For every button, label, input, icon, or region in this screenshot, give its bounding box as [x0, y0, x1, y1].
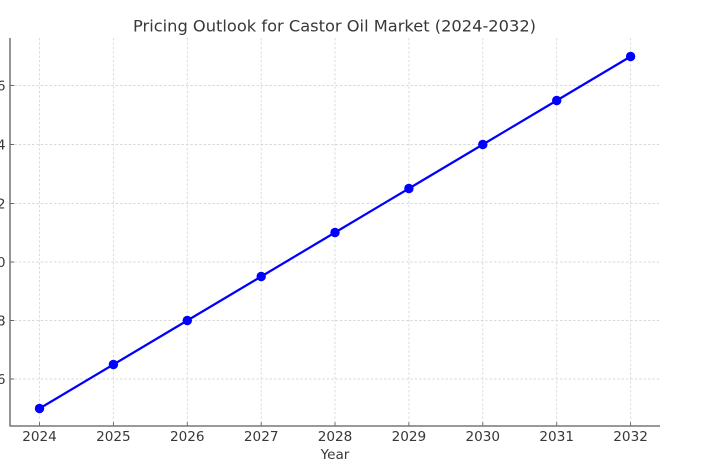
chart title: Pricing Outlook for Castor Oil Market (2024-2032) — [133, 16, 536, 36]
x axis — [10, 422, 660, 445]
x axis label: Year — [320, 447, 350, 463]
x axis: 2027 — [244, 429, 279, 445]
x axis: 2032 — [613, 429, 648, 445]
y axis — [0, 38, 14, 426]
x axis: 2029 — [392, 429, 426, 445]
x axis: 2026 — [170, 429, 205, 445]
x axis: 2024 — [22, 429, 57, 445]
x axis: 2031 — [539, 429, 574, 445]
x axis: 2025 — [96, 429, 131, 445]
price line series — [35, 52, 635, 413]
x axis: 2028 — [318, 429, 352, 445]
x axis: 2030 — [465, 429, 500, 445]
